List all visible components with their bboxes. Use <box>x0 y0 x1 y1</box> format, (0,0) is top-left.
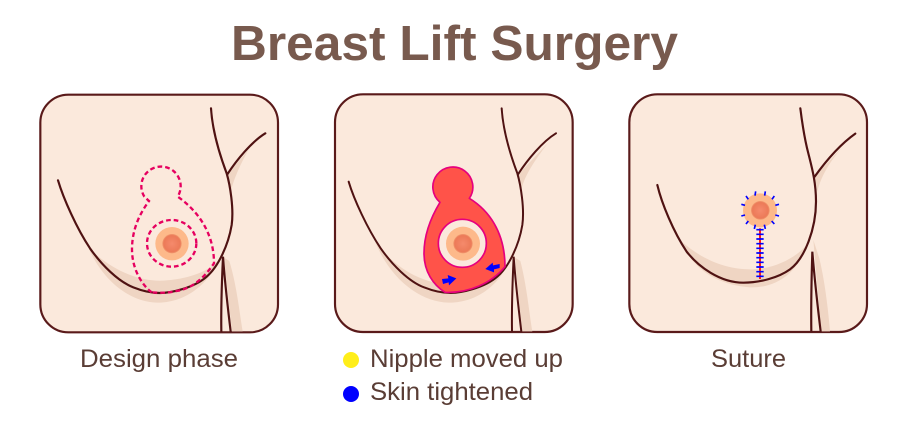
legend: nipple moved up <box>343 345 563 373</box>
legend dot: yellow <box>343 352 359 368</box>
arrow: skin tightened left <box>442 275 456 285</box>
areola <box>446 227 480 261</box>
blue sutures around areola <box>741 191 779 229</box>
torso lines <box>221 257 231 332</box>
vertical suture line <box>757 228 763 279</box>
title: Breast Lift Surgery <box>231 17 678 71</box>
panel: suture <box>629 94 867 332</box>
nipple <box>751 201 770 220</box>
armpit line <box>518 133 556 174</box>
retained skin ring <box>438 219 486 267</box>
panel background <box>629 94 867 332</box>
panel: nipple moved up and skin tightened <box>335 94 573 332</box>
nipple <box>453 234 473 253</box>
areola <box>743 193 777 227</box>
breast outline <box>58 108 232 293</box>
red excision area <box>424 167 505 292</box>
torso lines <box>512 257 521 332</box>
panel background <box>335 94 573 332</box>
legend: skin tightened <box>343 378 533 406</box>
panel background <box>40 95 278 332</box>
armpit line <box>815 134 855 177</box>
breast outline <box>657 108 816 283</box>
armpit line <box>227 133 265 174</box>
skin shadows <box>375 143 548 331</box>
legend text: nipple moved up: Nipple moved up <box>370 345 563 373</box>
areola <box>155 227 189 260</box>
nipple <box>162 234 182 253</box>
panel: design phase <box>40 95 278 332</box>
arrow: skin tightened right <box>485 263 500 272</box>
torso lines <box>811 252 821 332</box>
skin shadows <box>88 150 248 331</box>
legend text: skin tightened: Skin tightened <box>370 378 533 406</box>
legend dot: blue <box>343 386 359 402</box>
label: design phase: Design phase <box>80 345 238 373</box>
label: suture: Suture <box>711 345 786 373</box>
breast outline <box>349 108 523 293</box>
blue vertical stitches <box>756 230 764 276</box>
skin shadows <box>680 142 847 331</box>
dashed incision outline <box>132 167 214 293</box>
dashed areola circle <box>147 220 196 267</box>
